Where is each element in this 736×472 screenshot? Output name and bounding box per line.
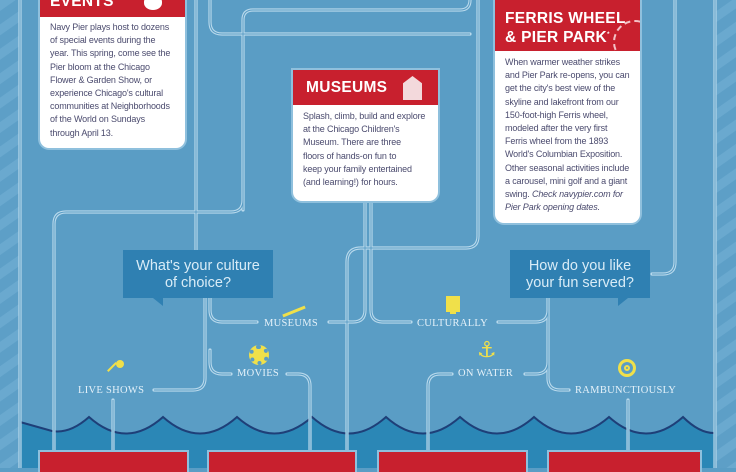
label: culturally: CULTURALLY: [417, 318, 488, 329]
bottom cards: [40, 452, 187, 472]
card: ferris wheel: Ferris wheel from the 1893: [505, 136, 608, 146]
card: ferris wheel: modeled after the very first: [505, 123, 607, 133]
card: events: experience Chicago's cultural: [50, 88, 163, 98]
bubble: culture: What's your culture: [136, 258, 260, 274]
water: [20, 417, 716, 468]
icon: anchor: ⚓︎: [477, 338, 497, 363]
card: events: of special events during the: [50, 35, 155, 45]
card: ferris wheel: FERRIS WHEEL: [505, 10, 626, 27]
bubble: fun: your fun served?: [526, 275, 634, 291]
card: ferris wheel: swing. Check navypier.com for: [505, 189, 623, 199]
icon: building: [403, 76, 422, 100]
card: ferris wheel: get the city's best view of the: [505, 83, 615, 93]
card: museums: keep your family entertained: [303, 164, 412, 174]
card: museums: Splash, climb, build and explore: [303, 111, 425, 121]
icon: microphone: [107, 360, 124, 372]
card: events: through April 13.: [50, 128, 113, 138]
card: museums: Museum. There are three: [303, 137, 401, 147]
label: museums: MUSEUMS: [264, 318, 318, 329]
card: events: Flower & Garden Show, or: [50, 75, 152, 85]
card: ferris wheel: a carousel, mini golf and a giant: [505, 176, 627, 186]
label: rambunctiously: RAMBUNCTIOUSLY: [575, 385, 676, 396]
label: live shows: LIVE SHOWS: [78, 385, 144, 396]
card: ferris wheel: When warmer weather strikes: [505, 57, 620, 67]
card: events: Pier bloom at the Chicago: [50, 62, 150, 72]
card: museums: floors of hands-on fun to: [303, 151, 396, 161]
card: ferris wheel: & PIER PARK*: [505, 29, 610, 46]
label: on water: ON WATER: [458, 368, 513, 379]
icon: swirl: [618, 359, 636, 377]
card: museums: [293, 70, 438, 201]
card: events: [40, 0, 185, 148]
card: ferris wheel: skyline and lakefront from our: [505, 97, 619, 107]
card: ferris wheel: [495, 0, 640, 223]
icon: top hat: [446, 296, 460, 312]
icon: brush: [282, 306, 306, 317]
bubble: fun: How do you like: [529, 258, 631, 274]
card: events: year. This spring, come see the: [50, 48, 170, 58]
icon: ferris wheel: [613, 20, 657, 64]
card: ferris wheel: World's Columbian Exposition.: [505, 149, 622, 159]
card: events: of the World on Sundays: [50, 114, 145, 124]
bubble: fun: [510, 250, 650, 298]
icon: masks: [144, 0, 162, 10]
card: events: communities at Neighborhoods: [50, 101, 170, 111]
icon: film reel: [249, 345, 269, 365]
card: museums: (and learning!) for hours.: [303, 177, 398, 187]
card: ferris wheel: Other seasonal activities include: [505, 163, 629, 173]
card: ferris wheel: 150-foot-high Ferris wheel,: [505, 110, 608, 120]
card: ferris wheel: Pier Park opening dates.: [505, 202, 600, 212]
bubble: culture: of choice?: [165, 275, 231, 291]
card: museums: at the Chicago Children's: [303, 124, 400, 134]
label: movies: MOVIES: [237, 368, 279, 379]
card: events: Navy Pier plays host to dozens: [50, 22, 169, 32]
card: ferris wheel: and Pier Park re-opens, you can: [505, 70, 629, 80]
card: museums: MUSEUMS: [306, 79, 387, 96]
bubble: culture: [123, 250, 273, 298]
